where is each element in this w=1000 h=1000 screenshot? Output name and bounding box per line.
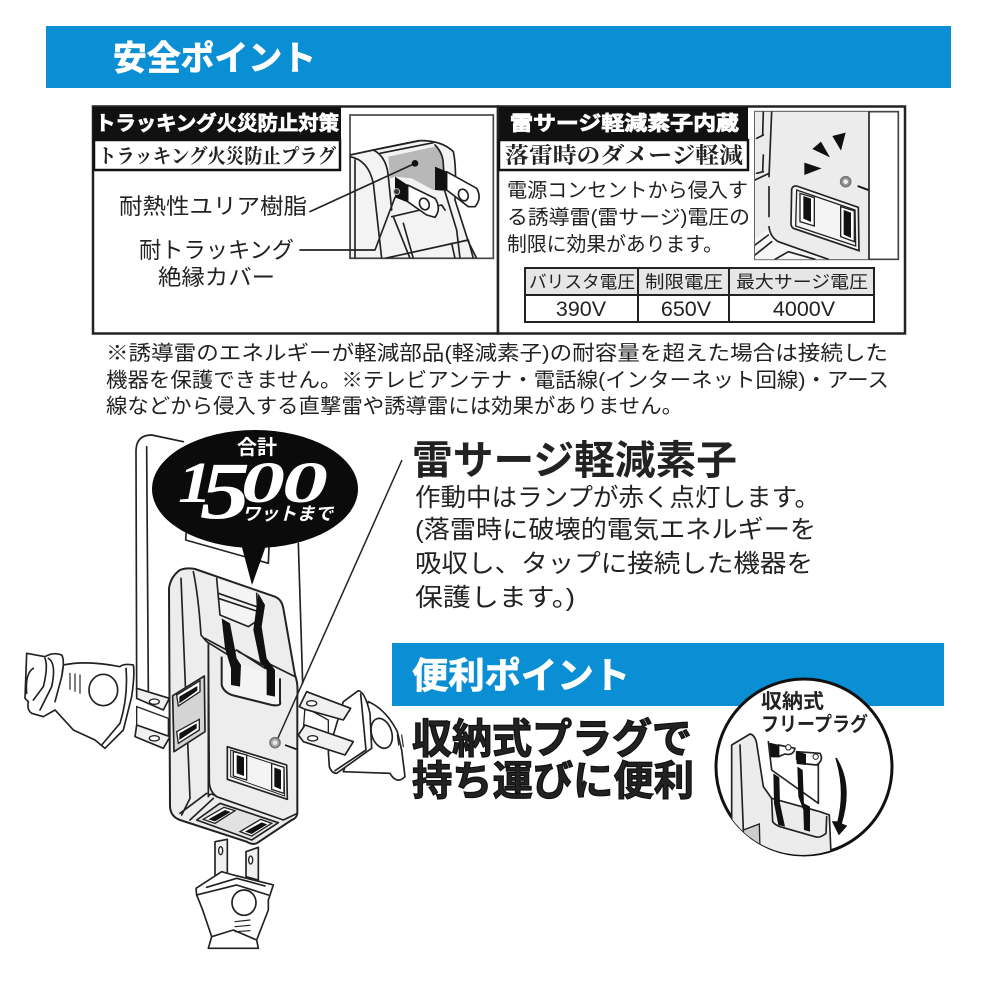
speech bubble: total 1500 watts: ワットまで xyxy=(242,504,335,524)
leader line: resin xyxy=(310,160,418,212)
callout: retractable free plug xyxy=(716,679,892,870)
strip body xyxy=(169,568,298,844)
heading: retractable plug convenient to carry: 収納式プラグで xyxy=(412,716,692,762)
icon: surge rays xyxy=(804,133,846,175)
label: heat-resistant urea resin: 耐熱性ユリア樹脂 xyxy=(119,194,307,219)
text block: surge description: 吸収し、タップに接続した機器を xyxy=(415,550,813,578)
text block: surge description: 保護します。) xyxy=(415,584,575,612)
indicator lamp xyxy=(270,738,297,749)
icon: fold arrow xyxy=(833,758,846,834)
subheading: tracking fire prevention plug xyxy=(94,140,340,170)
leader line: cover xyxy=(300,197,395,250)
right plug xyxy=(298,691,405,780)
disclaimer note: 線などから侵入する直撃雷や誘導雷には効果がありません。 xyxy=(106,395,683,418)
header bar: safety points: 安全ポイント xyxy=(113,40,316,78)
label: retractable free plug xyxy=(761,690,868,736)
side outlets xyxy=(173,676,205,752)
table: voltage specifications: 650V xyxy=(661,297,712,321)
front outlet xyxy=(227,747,287,799)
subheading: tracking fire prevention plug: トラッキング火災防止プラグ xyxy=(98,145,336,168)
icon: outlet xyxy=(791,186,859,251)
text block: surge description xyxy=(415,484,820,612)
speech bubble: total 1500 watts: 合計 xyxy=(237,436,277,459)
heading: retractable plug convenient to carry xyxy=(412,716,694,804)
heading: tracking fire prevention measures xyxy=(93,107,341,140)
description text: 電源コンセントから侵入す xyxy=(507,179,748,202)
description text xyxy=(507,179,750,256)
label: retractable free plug: 収納式 xyxy=(761,690,824,713)
bottom plug xyxy=(196,839,273,948)
blades xyxy=(137,707,168,737)
heading: surge reduction element: 雷サージ軽減素子 xyxy=(412,439,737,483)
illustration: power strip with plugs xyxy=(25,435,405,948)
text block: surge description: 作動中はランプが赤く点灯します。 xyxy=(415,484,820,512)
label: retractable free plug: フリープラグ xyxy=(761,712,868,736)
text block: surge description: (落雷時に破壊的電気エネルギーを xyxy=(415,516,816,544)
heading: built-in surge element: 雷サージ軽減素子内蔵 xyxy=(510,111,739,135)
header bar: safety points xyxy=(46,26,951,88)
subheading: damage reduction: 落雷時のダメージ軽減 xyxy=(505,143,743,168)
label: tracking-resistant insulating cover: 耐トラッキング xyxy=(139,238,294,263)
speech bubble: total 1500 watts: 5 xyxy=(200,445,250,536)
left plug xyxy=(25,653,170,748)
heading: tracking fire prevention measures: トラッキング火災防止対策 xyxy=(95,111,339,135)
table: voltage specifications: 4000V xyxy=(773,297,836,321)
illustration: folding plug xyxy=(732,734,832,870)
panel: lightning surge reduction xyxy=(498,106,905,334)
icon: plug blade left xyxy=(394,177,438,217)
disclaimer note xyxy=(106,342,889,418)
top detail: retractable plug recess xyxy=(181,572,295,815)
panel: tracking fire prevention xyxy=(93,106,498,334)
leader line: surge element to lamp xyxy=(278,460,402,738)
speech bubble: total 1500 watts: 0 xyxy=(282,450,328,515)
speech bubble: total 1500 watts xyxy=(152,430,358,585)
disclaimer note: ※誘導雷のエネルギーが軽減部品(軽減素子)の耐容量を超えた場合は接続した xyxy=(106,342,888,365)
table: voltage specifications: バリスタ電圧 xyxy=(529,272,635,292)
heading: retractable plug convenient to carry: 持ち運びに便利 xyxy=(412,758,694,804)
heading: built-in surge element xyxy=(499,107,748,140)
illustration: surge lamp closeup xyxy=(755,112,898,259)
speech bubble: total 1500 watts: 1 xyxy=(178,450,212,515)
illustration: plug closeup xyxy=(300,115,493,258)
table: voltage specifications: 制限電圧 xyxy=(645,272,723,292)
wall plate xyxy=(136,435,303,693)
table: voltage specifications: 390V xyxy=(556,297,607,321)
header bar: convenience points xyxy=(392,643,944,706)
label: tracking-resistant insulating cover xyxy=(139,238,294,290)
bottom outlets xyxy=(197,803,278,840)
icon: plug blade right xyxy=(435,167,479,207)
label: tracking-resistant insulating cover: 絶縁カバー xyxy=(158,265,275,290)
disclaimer note: 機器を保護できません。※テレビアンテナ・電話線(インターネット回線)・アース xyxy=(106,369,889,392)
description text: 制限に効果があります。 xyxy=(507,233,723,256)
speech bubble: total 1500 watts: 0 xyxy=(241,450,285,515)
description text: る誘導雷(雷サージ)電圧の xyxy=(507,206,750,229)
table: voltage specifications: 最大サージ電圧 xyxy=(736,272,868,292)
table: voltage specifications xyxy=(525,268,874,322)
header bar: convenience points: 便利ポイント xyxy=(412,655,630,696)
icon: lamp xyxy=(841,177,868,190)
